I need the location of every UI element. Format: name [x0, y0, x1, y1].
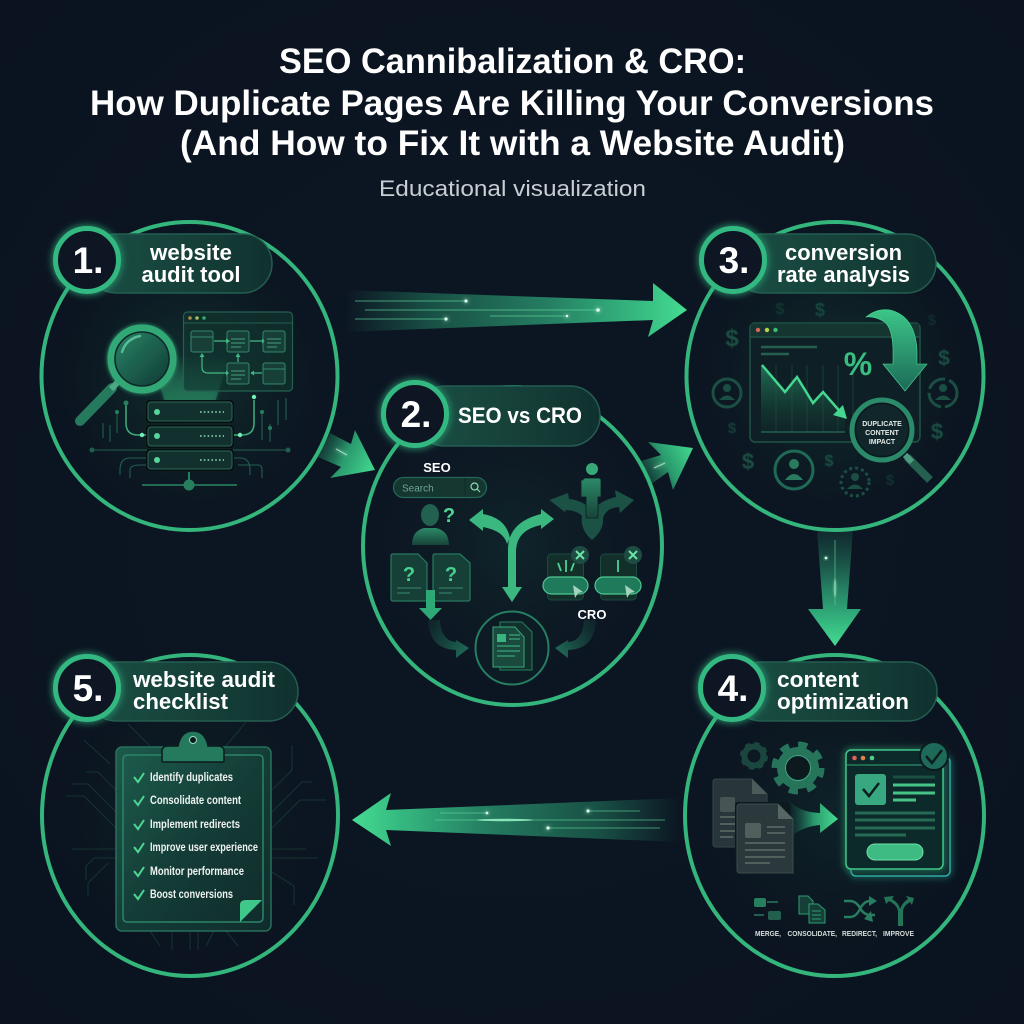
- badge 2: 2.: [401, 394, 431, 435]
- badge 1: website: [149, 240, 232, 265]
- badge 3: rate analysis: [777, 262, 910, 287]
- badge 4: [700, 656, 937, 721]
- badge 1: 1.: [73, 240, 103, 281]
- icon: faint circuit traces: [66, 722, 326, 950]
- arrow: documents to page: [788, 797, 838, 834]
- arrow: step 2 to step 3: [638, 442, 693, 490]
- search bar: Search: [402, 484, 434, 494]
- label: SEO: SEO: [423, 460, 451, 475]
- badge 1: audit tool: [142, 262, 240, 287]
- title: SEO Cannibalization & CRO:: [279, 42, 746, 81]
- icon: circuit nodes: [90, 395, 290, 452]
- icon: duplicate pages: ?: [403, 564, 415, 586]
- badge 2: [384, 382, 600, 446]
- icon: impact magnifier: [852, 400, 930, 480]
- icon: impact magnifier: IMPACT: [869, 439, 896, 446]
- icon: person at fork: [550, 463, 634, 540]
- badge 3: 3.: [719, 240, 749, 281]
- icon: faint dollar signs: $: [776, 301, 785, 318]
- ring 3: [686, 222, 984, 530]
- arrow: step 1 to step 3: [345, 283, 687, 337]
- panel: optimized page: [846, 742, 950, 876]
- badge 5: 5.: [73, 668, 103, 709]
- ring 1: [42, 222, 338, 530]
- line chart: falling conversions: [761, 365, 853, 432]
- arrow: merge right: [555, 620, 596, 658]
- panel 1: website audit tool: [42, 222, 338, 530]
- icon: faint dollar signs: $: [886, 472, 895, 489]
- icon captions: [755, 929, 914, 938]
- badge 4: content: [777, 667, 860, 692]
- icon: duplicate pages: ?: [445, 564, 457, 586]
- panel 2: SEO vs CRO: [363, 382, 662, 705]
- icon captions: IMPROVE: [883, 929, 914, 938]
- icon: impact magnifier: DUPLICATE: [862, 421, 902, 428]
- icon: percent sign: %: [844, 346, 872, 382]
- icon: flow diagram window: [184, 312, 292, 391]
- icon: confused user: [412, 504, 455, 545]
- badge 5: [56, 656, 298, 721]
- icon captions: MERGE,: [755, 929, 781, 938]
- badge 1: [56, 228, 272, 293]
- icon: small gear: [743, 745, 765, 767]
- icon: magnifying glass: [80, 328, 173, 421]
- icon: faint dollar signs: [725, 300, 950, 489]
- icon: faint user rings: [713, 379, 957, 496]
- ring 5: [42, 655, 338, 976]
- icon: circuit traces: [94, 398, 288, 478]
- icon captions: REDIRECT,: [842, 929, 877, 938]
- icon: faint dollar signs: $: [742, 449, 754, 474]
- icons: merge consolidate redirect improve: [754, 896, 914, 926]
- icon: faint dollar signs: $: [728, 420, 737, 437]
- checklist: Improve user experience: [150, 842, 258, 854]
- icon: failed CTA cards: [543, 546, 642, 600]
- title: How Duplicate Pages Are Killing Your Conversions: [90, 84, 934, 123]
- arrow: step 1 to step 2: [318, 430, 375, 478]
- badge 2: SEO vs CRO: [458, 403, 582, 428]
- title: [90, 42, 934, 163]
- badge 4: optimization: [777, 689, 909, 714]
- title: (And How to Fix It with a Website Audit): [180, 124, 845, 163]
- icon: impact magnifier: CONTENT: [865, 430, 900, 437]
- arrow: split paths: [469, 509, 554, 602]
- search bar: [394, 478, 486, 498]
- icon: faint dollar signs: $: [725, 325, 739, 352]
- ring 2: [363, 387, 662, 705]
- label: CRO: CRO: [578, 607, 606, 622]
- icon: stacked old documents: [713, 779, 793, 873]
- checklist: Implement redirects: [150, 819, 240, 831]
- badge 3: [702, 228, 936, 293]
- panel 3: conversion rate analysis: [686, 222, 984, 530]
- icon captions: CONSOLIDATE,: [788, 929, 837, 938]
- panel 5: website audit checklist: [42, 655, 338, 976]
- icon: faint dollar signs: $: [938, 347, 950, 370]
- checklist: Boost conversions: [150, 889, 233, 901]
- arrow: step 4 to step 5: [352, 793, 680, 846]
- badge 3: conversion: [785, 240, 902, 265]
- subtitle: Educational visualization: [379, 176, 646, 201]
- arrow: merge left: [428, 620, 469, 658]
- icon: faint dollar signs: $: [931, 419, 943, 444]
- panel 4: content optimization: [685, 655, 984, 976]
- icon: faint dollar signs: $: [815, 300, 825, 320]
- icon: large gear: [776, 746, 820, 790]
- panel: analytics window: [750, 323, 920, 442]
- badge 5: website audit: [132, 667, 276, 692]
- icon: clipboard: [116, 731, 271, 931]
- arrow: big drop: [866, 310, 927, 391]
- icon: duplicate pages: [391, 554, 470, 601]
- icon: server rack: [142, 401, 237, 490]
- arrow: pages down: [419, 590, 442, 620]
- icon: faint dollar signs: $: [825, 453, 834, 470]
- icon: canonical page hub: [476, 612, 548, 684]
- icon: server glow: [150, 355, 230, 402]
- checklist: Identify duplicates: [150, 772, 233, 784]
- badge 4: 4.: [718, 668, 748, 709]
- badge 5: checklist: [133, 689, 229, 714]
- checklist: Monitor performance: [150, 866, 244, 878]
- checklist: [134, 772, 258, 901]
- checklist: Consolidate content: [150, 795, 241, 807]
- ring 4: [685, 655, 984, 976]
- icon: confused user: ?: [443, 505, 455, 527]
- icon: faint dollar signs: $: [928, 312, 937, 329]
- arrow: step 3 to step 4: [808, 530, 861, 646]
